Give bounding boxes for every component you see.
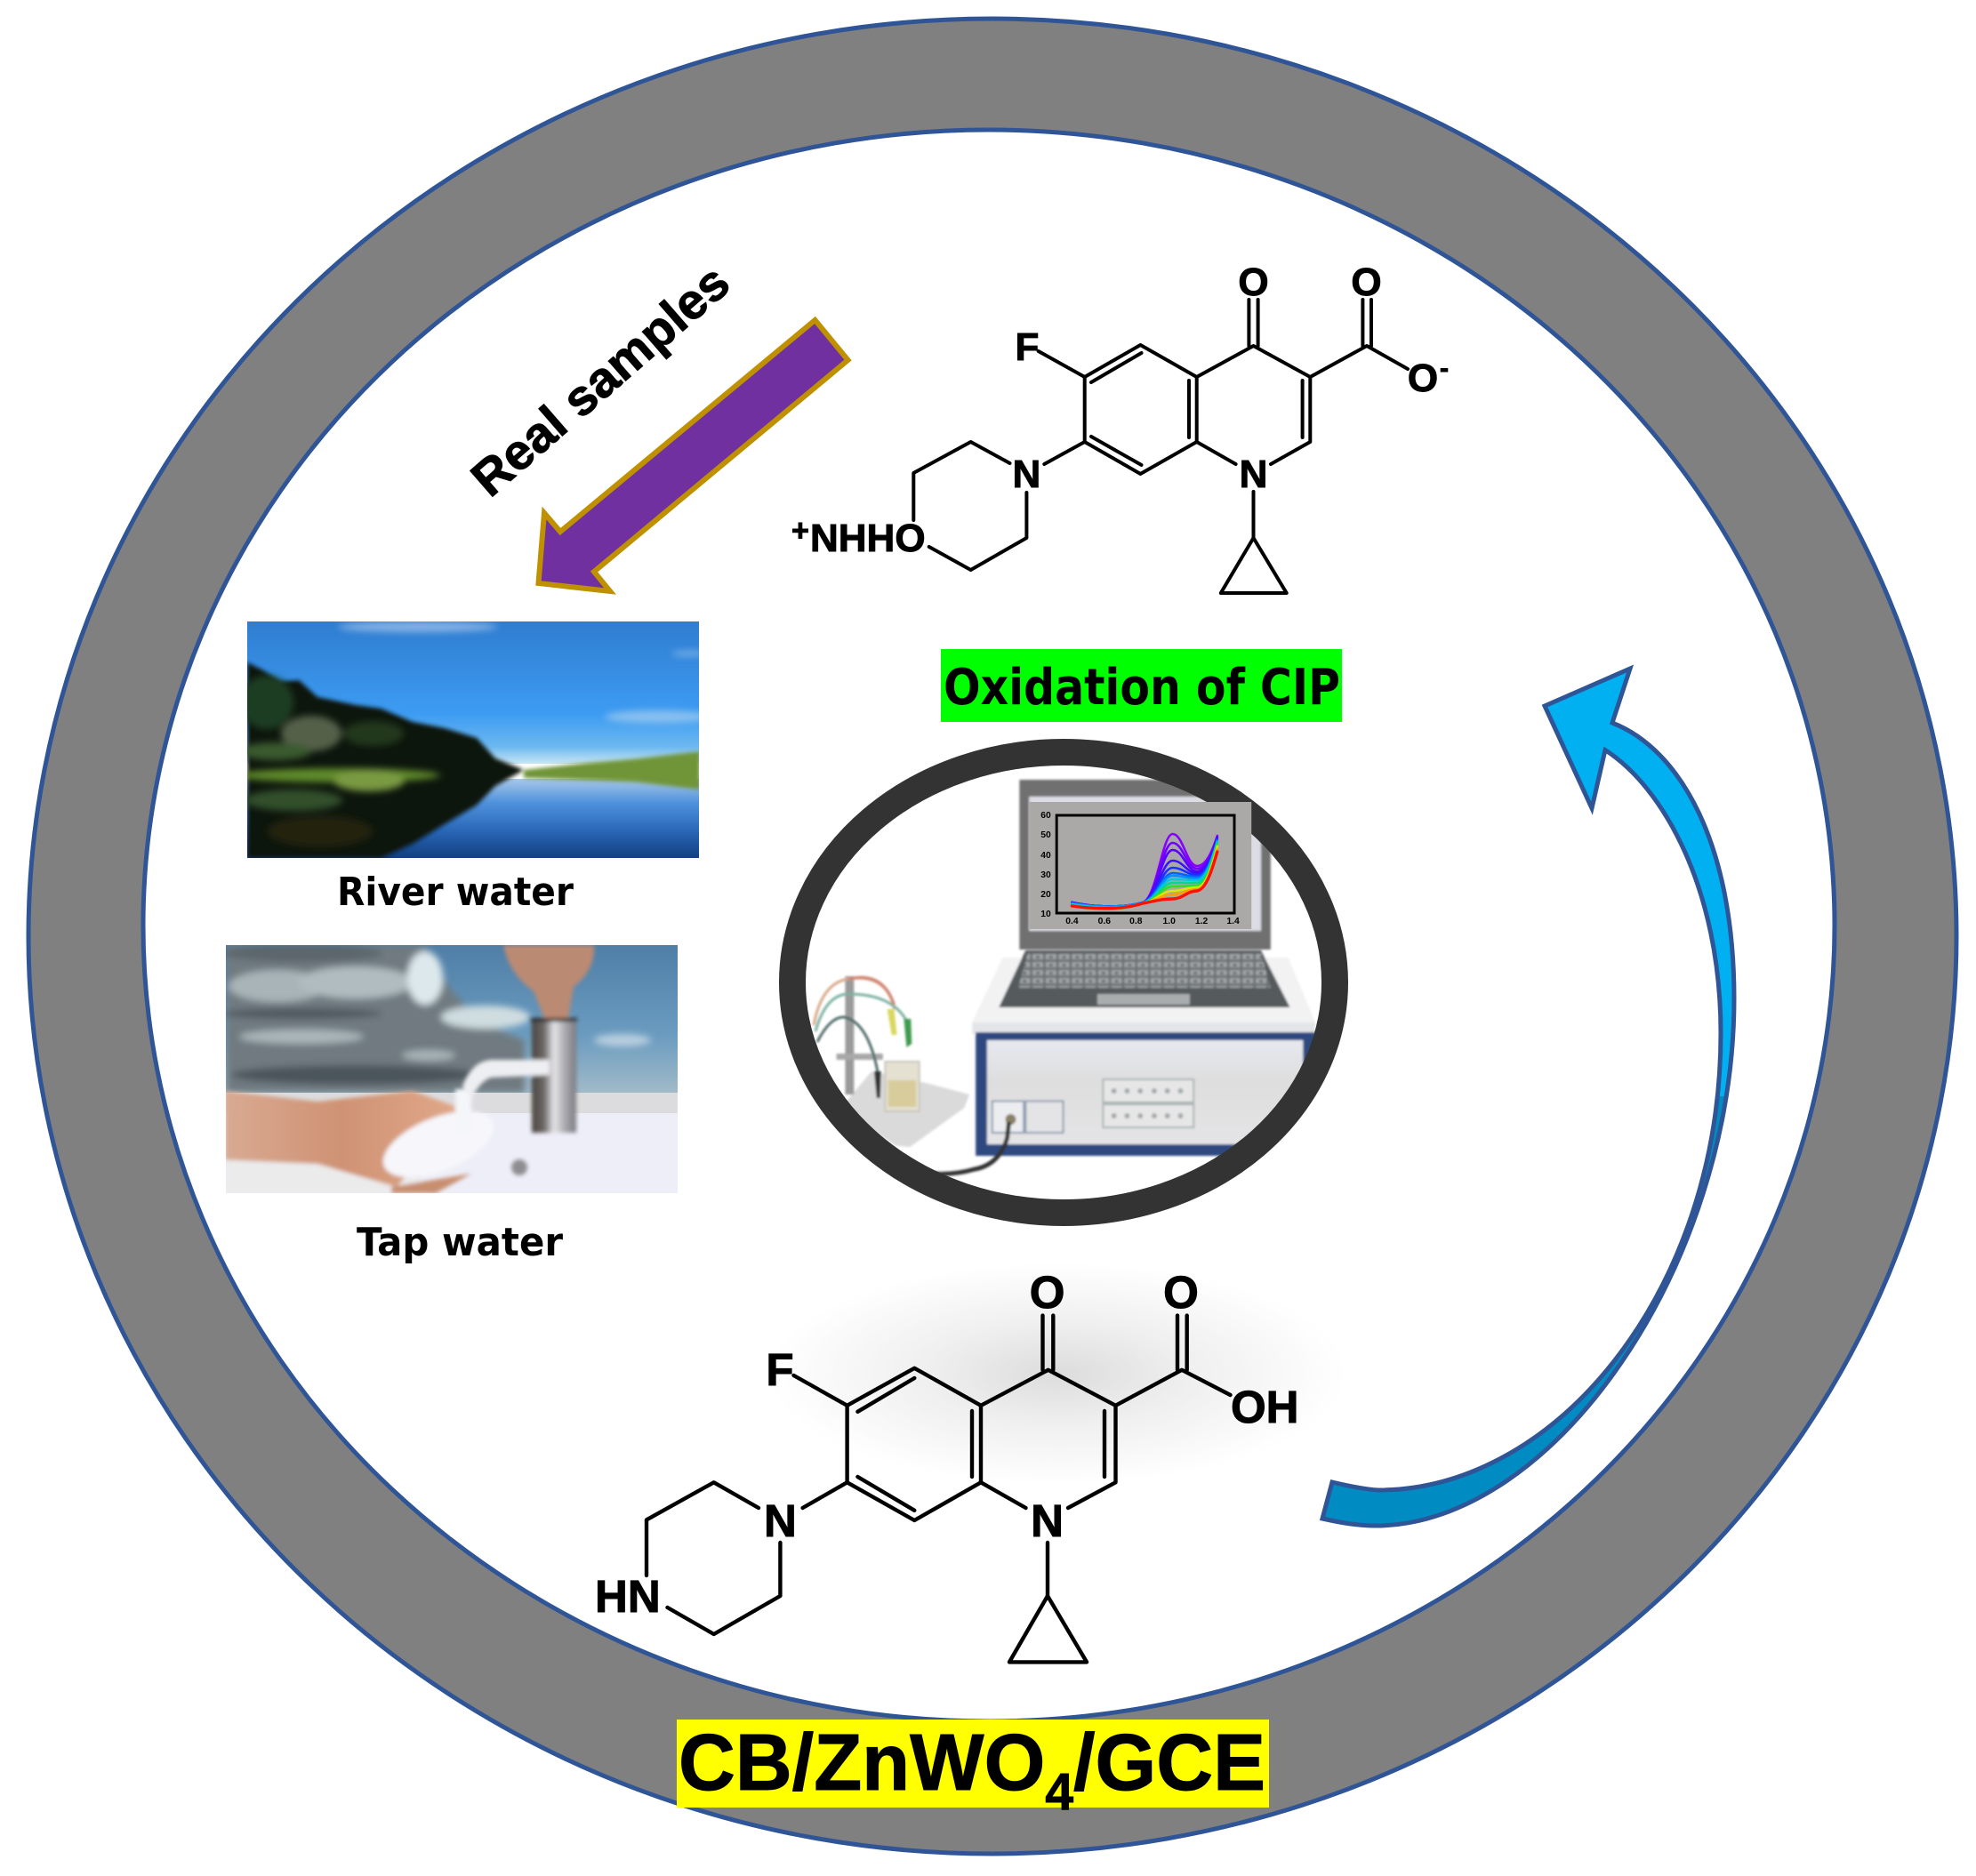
voltammogram chart: 30: [1040, 870, 1051, 880]
molecule: oxidized CIP: -: [1440, 354, 1449, 383]
voltammogram chart: 0.4: [1065, 917, 1079, 926]
molecule: ciprofloxacin: OH: [1231, 1382, 1298, 1432]
molecule: ciprofloxacin: N: [764, 1495, 797, 1546]
heading: Real samples: Real samples: [461, 253, 740, 507]
voltammogram chart: 0.6: [1098, 917, 1111, 926]
molecule: oxidized CIP: O: [1351, 261, 1382, 304]
voltammogram chart: 50: [1040, 830, 1051, 840]
label: Tap water: Tap water: [357, 1220, 563, 1265]
voltammogram chart: 10: [1040, 910, 1051, 919]
lens contents: [814, 780, 1315, 1174]
molecule: oxidized CIP: NHHO: [810, 517, 926, 560]
voltammogram chart: 1.2: [1195, 917, 1208, 926]
molecule: ciprofloxacin: O: [1030, 1267, 1064, 1318]
label: CB/ZnWO4/GCE: 4: [1045, 1764, 1073, 1821]
molecule: ciprofloxacin: F: [766, 1344, 794, 1395]
lens ring: [792, 752, 1335, 1213]
molecule: oxidized CIP: +: [791, 514, 809, 548]
voltammogram chart: 0.8: [1129, 917, 1143, 926]
molecule: ciprofloxacin: HN: [595, 1571, 661, 1622]
voltammogram chart: 20: [1040, 890, 1051, 900]
molecule: oxidized CIP: N: [1240, 453, 1267, 496]
label: River water: River water: [337, 870, 574, 915]
molecule: oxidized CIP: O: [1238, 261, 1269, 304]
molecule glow: [769, 1263, 1347, 1485]
molecule: ciprofloxacin: [595, 1267, 1298, 1662]
molecule: oxidized CIP: N: [1013, 453, 1040, 496]
voltammogram chart: [1029, 802, 1251, 929]
voltammogram chart: 1.0: [1162, 917, 1176, 926]
label: CB/ZnWO4/GCE: CB/ZnWO: [679, 1717, 1045, 1807]
voltammogram chart: 1.4: [1226, 917, 1240, 926]
label: Oxidation of CIP: Oxidation of CIP: [944, 659, 1340, 717]
photo: tap: [222, 944, 678, 1193]
arrow: real samples purple arrow: [539, 320, 848, 591]
arrow: blue curved: [1322, 669, 1734, 1526]
photo: river: [236, 621, 711, 858]
label: CB/ZnWO4/GCE: /GCE: [1073, 1717, 1265, 1807]
lens: electrochemical workstation: [792, 752, 1335, 1213]
molecule: oxidized CIP: F: [1016, 325, 1039, 369]
voltammogram chart: 40: [1040, 851, 1051, 861]
label: CB/ZnWO4/GCE: [677, 1717, 1269, 1821]
molecule: ciprofloxacin: N: [1031, 1495, 1064, 1546]
molecule: oxidized CIP: O: [1408, 357, 1438, 400]
molecule: ciprofloxacin: O: [1163, 1267, 1199, 1318]
voltammogram chart: 60: [1040, 811, 1051, 821]
molecule: oxidized CIP: [791, 261, 1449, 593]
